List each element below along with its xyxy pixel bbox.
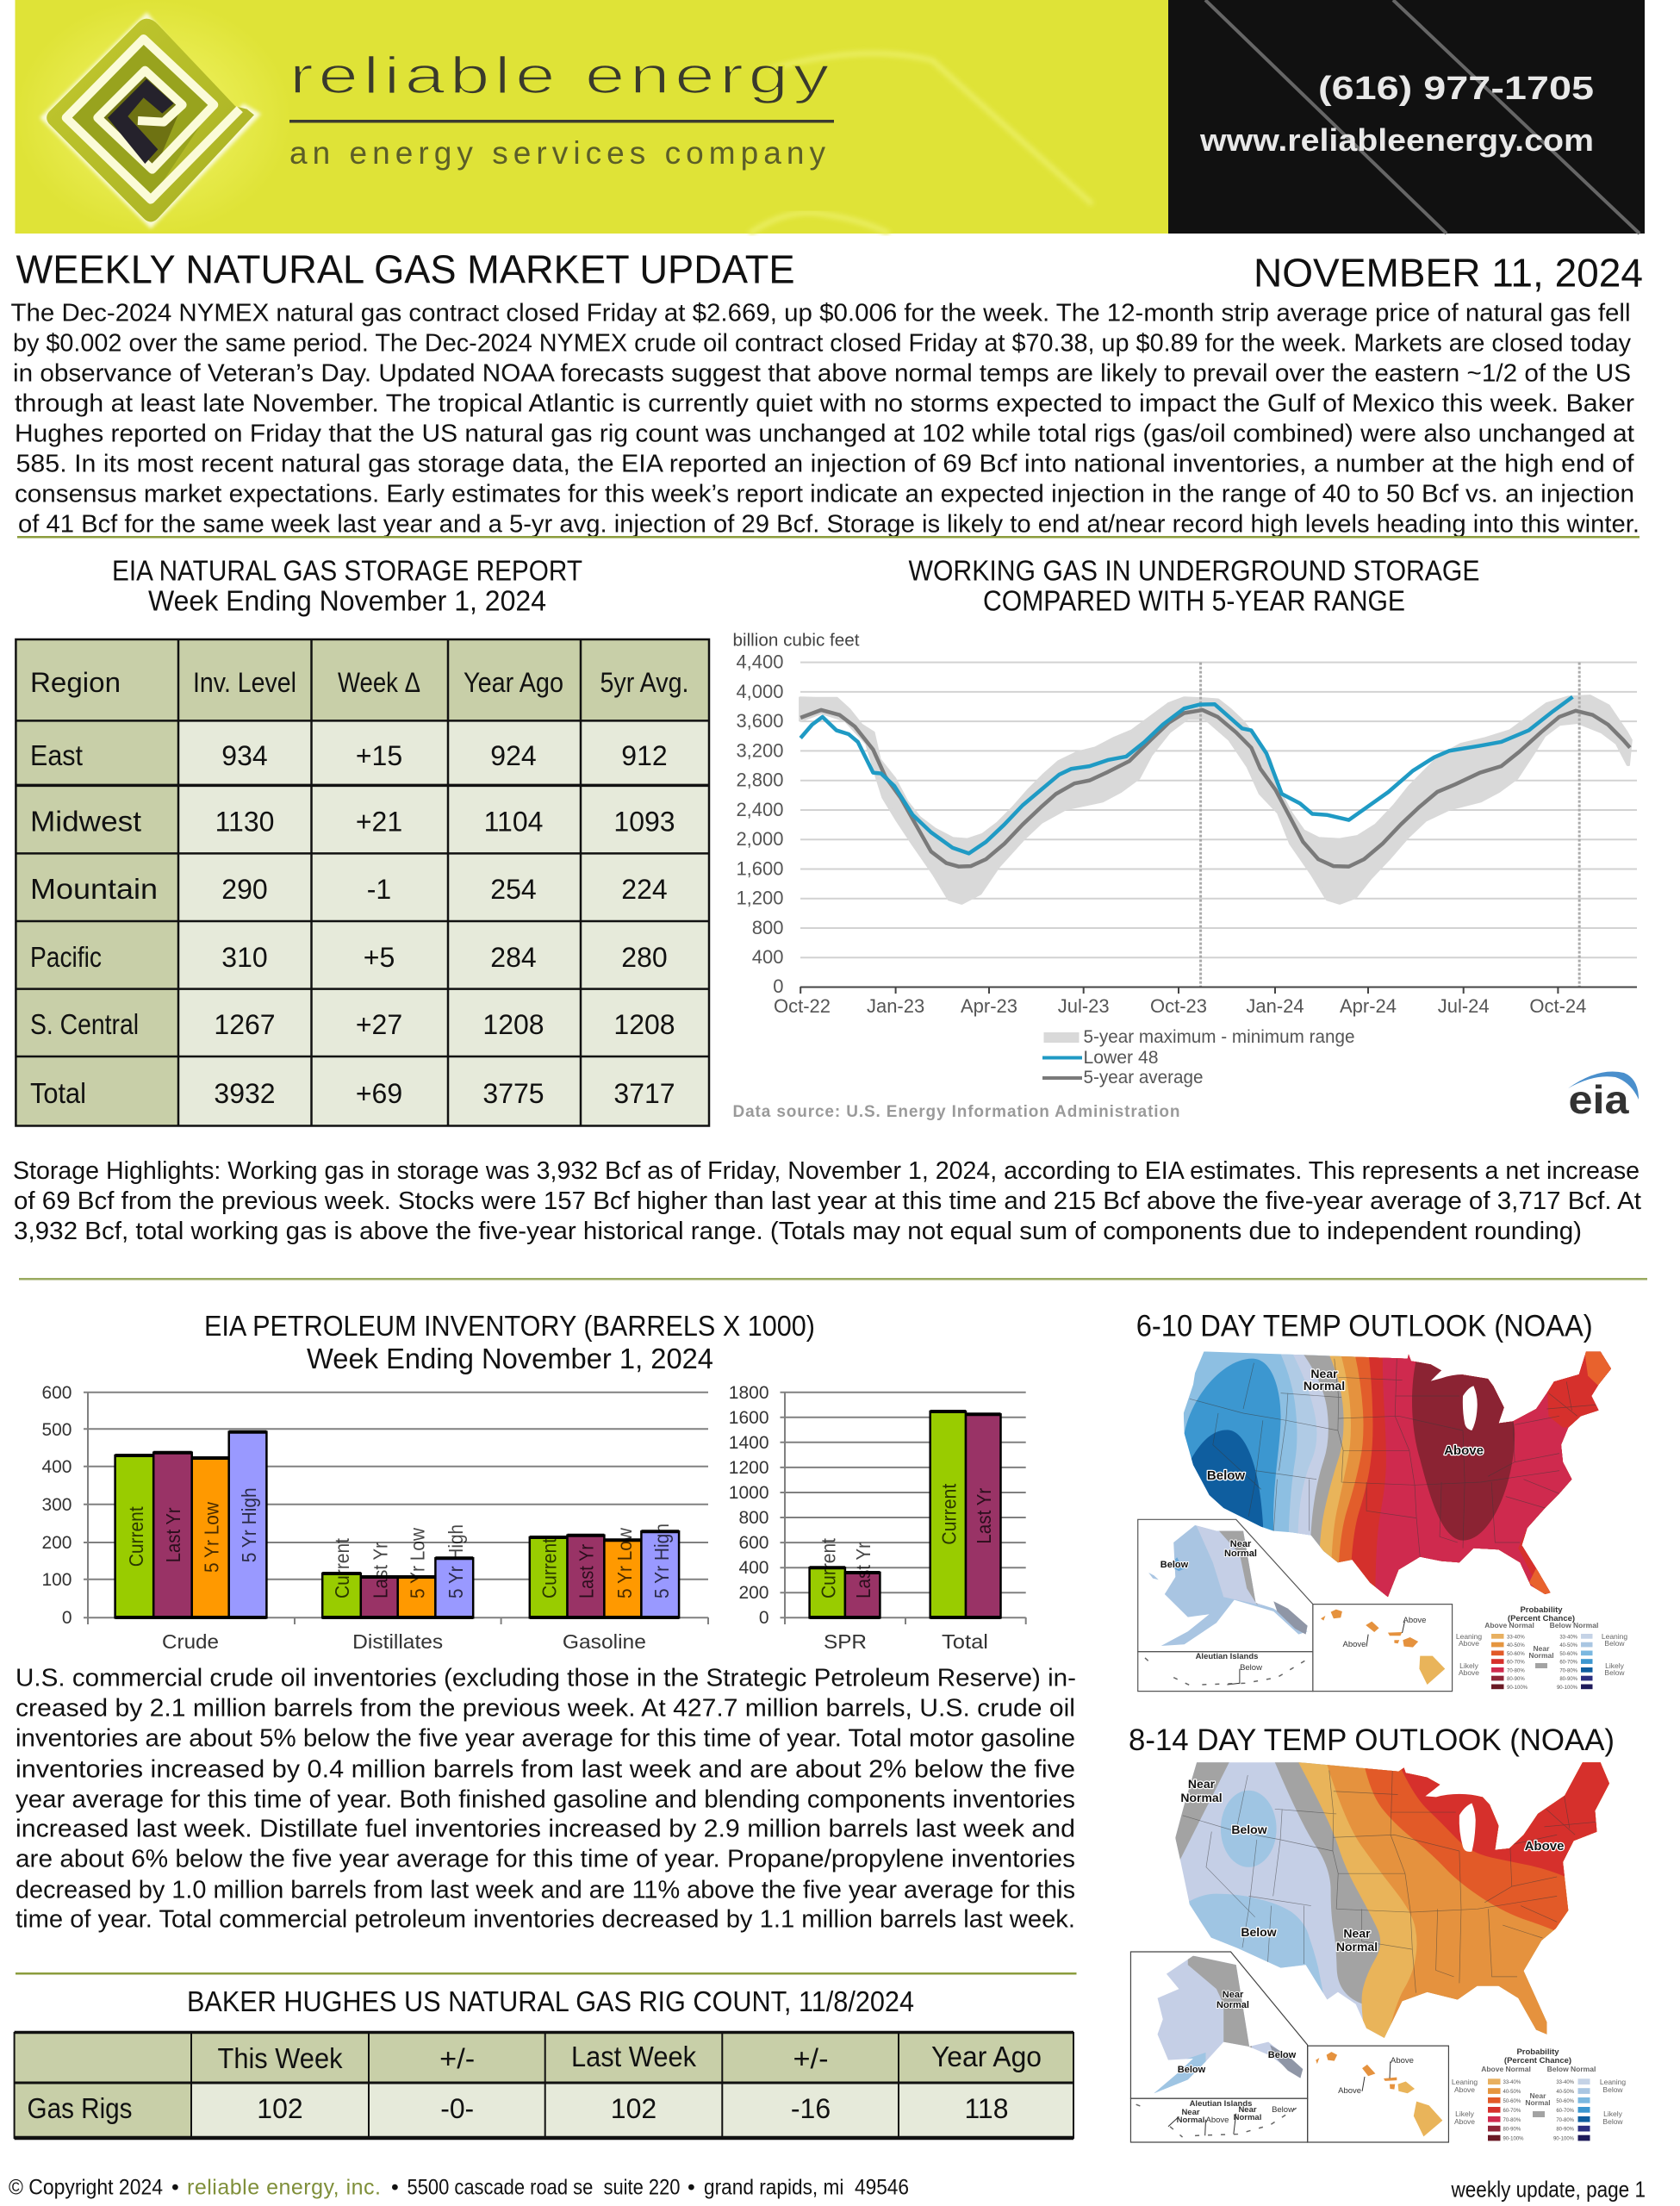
chart: working gas line chart: 2,000 [736,828,784,850]
chart: working gas line chart: billion cubic feet [732,631,860,650]
table: storage report: 290 [221,874,268,905]
chart: petroleum bars left: 300 [41,1495,72,1515]
company name: reliable energy [289,47,834,104]
map legend: (Percent Chance) [1508,1614,1575,1623]
text block: market summary: The Dec-2024 NYMEX natural gas contract closed Friday at $2.669, up $0.006 for the week. The 12-month strip average price of natural gas fell [10,300,1630,327]
chart: petroleum bars right: Current [938,1483,961,1545]
table: storage report: 3932 [214,1078,276,1109]
table: rig count: This Week [217,2042,343,2074]
map: 8-14 day temperature outlook: Below [1231,1823,1267,1836]
data source note: Data source: U.S. Energy Information Administration [732,1103,1180,1121]
chart: working gas line chart: 0 [773,975,784,997]
map legend: 90-100% [1503,2137,1524,2142]
chart: working gas line chart: Jan-24 [1246,995,1304,1017]
text block: storage highlights: 3,932 Bcf, total working gas is above the five-year historical range. (Totals may not equal sum of components due to independent rounding) [14,1218,1582,1245]
map legend [1456,1605,1627,1691]
text block: market summary: in observance of Veteran’s Day. Updated NOAA forecasts suggest that above normal temps are likely to prevail over the eastern ~1/2 of the US [13,360,1631,388]
table: storage report: Pacific [30,941,102,973]
map legend: 40-50% [1559,1643,1578,1648]
chart: petroleum bars right: 1200 [729,1458,768,1478]
chart legend [1042,1027,1354,1087]
map legend: Below [1604,1668,1625,1677]
map: 8-14 day temperature outlook: Below [1268,2050,1297,2060]
chart: working gas line chart: 4,400 [736,651,784,672]
chart: petroleum bars right: 200 [738,1583,768,1603]
heading: 8-14 day outlook: 8-14 DAY TEMP OUTLOOK (NOAA) [1129,1723,1615,1757]
table: storage report: 254 [490,874,537,905]
table: storage report: Midwest [30,805,141,838]
map legend: Probability [1516,2047,1559,2057]
map legend: 90-100% [1557,1686,1578,1691]
table: storage report: +21 [356,807,402,838]
map legend: Above [1459,1639,1479,1648]
map legend: 33-40% [1559,1636,1578,1641]
footer: copyright and address: • [171,2175,179,2199]
chart: petroleum bars right: Total [942,1630,988,1653]
text block: market summary: through at least late November. The tropical Atlantic is currently quiet with no storms expected to impact the Gulf of Mexico this week. Baker [15,389,1634,417]
table: storage report: 310 [221,942,268,973]
contiguous US zones [1173,1347,1620,1605]
table: storage report: 280 [621,942,668,973]
table: storage report: 912 [621,740,668,771]
map: 6-10 day temperature outlook: Below [1240,1663,1262,1673]
chart: petroleum bars left: 5 Yr High [650,1524,673,1598]
chart: petroleum bars left: 5 Yr Low [613,1528,636,1598]
table: storage report: Week Δ [338,667,420,698]
header banner [16,0,1645,234]
chart: petroleum bars right: 400 [738,1558,768,1578]
table: storage report: 1104 [484,807,543,838]
chart: petroleum bars right: Last Yr [852,1542,874,1598]
text block: market summary: by $0.002 over the same period. The Dec-2024 NYMEX crude oil contract closed Friday at $70.38, up $0.89 for the week. Markets are closed today [13,329,1631,357]
table: storage report: +15 [356,740,402,771]
Alaska [1154,1956,1301,2094]
map: 6-10 day temperature outlook: Above [1343,1640,1366,1649]
icon: eia logo [1568,1071,1639,1122]
map legend: 60-70% [1556,2109,1575,2114]
chart legend: 5-year average [1084,1068,1203,1087]
map: 8-14 day temperature outlook: Near [1238,2105,1257,2115]
map legend: 80-90% [1556,2127,1575,2132]
chart: petroleum bars right: SPR [824,1630,867,1653]
chart: working gas line chart: 800 [752,917,784,938]
chart: petroleum bars right: Last Yr [973,1487,995,1544]
chart: petroleum bars right: 0 [759,1608,768,1628]
table: rig count: 102 [611,2093,656,2124]
chart: petroleum bars right: Current [817,1537,839,1598]
heading: petroleum inventory [204,1310,815,1374]
icon: eia logo: eia [1568,1077,1629,1122]
phone number: (616) 977-1705 [1318,71,1594,107]
chart: working gas line chart: Jul-24 [1438,995,1490,1017]
company tagline: an energy services company [289,135,825,171]
map legend: Below Normal [1550,1621,1598,1630]
insets frames [1138,1519,1453,1692]
heading: petroleum inventory: EIA PETROLEUM INVENTORY (BARRELS X 1000) [204,1310,815,1342]
table: storage report: 3717 [613,1078,675,1109]
table: storage report: 284 [490,942,537,973]
map: 8-14 day temperature outlook: Below [1272,2105,1294,2115]
map: 8-14 day temperature outlook: Normal [1336,1940,1378,1954]
table: rig count [15,2032,1073,2139]
website: www.reliableenergy.com [1199,122,1594,158]
map: 8-14 day temperature outlook: Below [1241,1925,1277,1939]
map legend: 80-90% [1503,2127,1521,2132]
table: storage report: 1130 [215,807,274,838]
Hawaii [1321,1610,1445,1685]
chart: petroleum bars left: Distillates [352,1630,443,1653]
map legend: Leaning [1602,1632,1627,1641]
chart: petroleum bars left: Crude [162,1630,219,1653]
table: storage report: Inv. Level [193,667,296,698]
map legend: Normal [1528,1651,1554,1660]
map: 8-14 day temperature outlook: Above [1338,2086,1361,2096]
map: 8-14 day temperature outlook: Near [1181,2108,1200,2117]
contiguous US zones [1170,1760,1620,2043]
chart: petroleum bars left: Gasoline [563,1630,646,1653]
map legend: Above Normal [1484,1621,1534,1630]
chart: petroleum bars right: 1600 [729,1408,768,1428]
table: storage report: 1208 [482,1009,544,1040]
table: rig count: +/- [439,2043,475,2074]
map legend: Near [1530,2091,1546,2100]
footer: copyright and address: © Copyright 2024 [9,2175,163,2199]
chart: petroleum bars left: 600 [41,1383,72,1403]
map: 8-14 day temperature outlook: Below [1178,2065,1206,2075]
chart: petroleum bars left: 5 Yr High [445,1524,467,1598]
text block: storage highlights: Storage Highlights: Working gas in storage was 3,932 Bcf as of Friday, November 1, 2024, according to EIA estimates. This represents a net increase [13,1157,1640,1185]
chart: petroleum bars left: 400 [41,1457,72,1477]
chart: working gas line chart: 4,000 [736,681,784,702]
heading: 6-10 day outlook: 6-10 DAY TEMP OUTLOOK (NOAA) [1136,1310,1593,1343]
map legend: 40-50% [1503,2090,1521,2095]
map legend: Above [1454,2117,1475,2126]
text block: petroleum commentary: decreased by 1.0 million barrels from last week and are 11% above the five year average for this [16,1876,1075,1904]
table: rig count: Last Week [571,2041,696,2072]
map legend: Probability [1520,1605,1563,1615]
chart: working gas line chart: Jul-23 [1058,995,1110,1017]
text block: petroleum commentary: are about 6% below the five year average for this time of year. Propane/propylene inventories [16,1846,1075,1873]
table: storage report: Region [30,667,121,698]
text block: petroleum commentary: increased last week. Distillate fuel inventories increased by 2.9 million barrels last week and [16,1816,1075,1843]
footer: copyright and address: • [688,2175,695,2199]
text block: market summary: of 41 Bcf for the same week last year and a 5-yr avg. injection of 29 Bcf. Storage is likely to end at/near record high levels heading into this winter. [18,510,1640,538]
text block: petroleum commentary [16,1665,1076,1934]
chart: petroleum bars right [729,1383,1026,1653]
text block: petroleum commentary: inventories are about 5% below the five year average for this time of year. Total motor gasoline [16,1725,1075,1753]
chart: petroleum bars left: Current [125,1506,147,1567]
table: rig count: 118 [964,2093,1009,2124]
chart: petroleum bars left: 5 Yr Low [200,1502,222,1573]
map legend: Likely [1459,1661,1479,1670]
map legend: Below [1604,1639,1625,1648]
Alaska [1161,1525,1308,1646]
map legend: 70-80% [1503,2118,1521,2123]
chart: petroleum bars right: 800 [738,1508,768,1528]
heading: petroleum inventory: Week Ending November 1, 2024 [307,1343,713,1374]
map: 8-14 day temperature outlook: Normal [1216,2000,1249,2010]
table: storage report: 924 [490,740,537,771]
map legend: 33-40% [1507,1636,1525,1641]
table: storage report: 1267 [214,1009,276,1040]
text block: petroleum commentary: creased by 2.1 million barrels from the previous week. At 427.7 million barrels, U.S. crude oil [16,1695,1075,1723]
chart: petroleum bars right: 1000 [729,1483,768,1503]
footer: copyright and address: reliable energy, inc. [187,2175,381,2199]
table: storage report: 1093 [613,807,675,838]
map legend: Above [1454,2085,1475,2094]
text block: market summary: consensus market expectations. Early estimates for this week’s report indicate an expected injection in the range of 40 to 50 Bcf vs. an injection [15,481,1634,508]
chart: working gas line chart: Oct-24 [1529,995,1586,1017]
chart: petroleum bars left: Last Yr [162,1507,184,1562]
footer: copyright and address [9,2175,909,2199]
text block: market summary: 585. In its most recent natural gas storage data, the EIA reported an injection of 69 Bcf into national inventories, a number at the high end of [16,450,1634,477]
map legend: 90-100% [1507,1686,1528,1691]
table: storage report: Total [30,1077,86,1109]
chart: working gas line chart: Apr-24 [1340,995,1397,1017]
map legend: 60-70% [1503,2109,1521,2114]
map: 8-14 day temperature outlook: Normal [1234,2113,1261,2122]
map legend: Below [1602,2117,1623,2126]
table: storage report: +5 [364,942,395,973]
chart: working gas line chart: 3,600 [736,710,784,732]
map: 8-14 day temperature outlook: Above [1391,2056,1414,2066]
map legend: 50-60% [1507,1652,1525,1657]
table: storage report: S. Central [30,1008,139,1040]
map: 6-10 day temperature outlook: Above [1403,1616,1426,1625]
heading: storage report [112,555,582,617]
table: rig count: -16 [791,2093,831,2124]
chart: working gas line chart: Oct-23 [1150,995,1207,1017]
map: 6-10 day temperature outlook: Below [1207,1468,1245,1483]
chart: petroleum bars right: 1400 [729,1433,768,1453]
map: 6-10 day temperature outlook: Near [1230,1539,1252,1549]
Great Lakes [1431,1357,1488,1430]
chart: working gas line chart: 1,200 [736,888,784,908]
text block: storage highlights: of 69 Bcf from the previous week. Stocks were 157 Bcf higher than last year at this time and 215 Bcf above the five-year average of 3,717 Bcf. At [14,1187,1641,1215]
table: storage report: 224 [621,874,668,905]
map legend: Below [1602,2085,1623,2094]
map legend: 80-90% [1507,1677,1525,1682]
map: 8-14 day temperature outlook [1130,1760,1626,2142]
chart: petroleum bars left: 5 Yr High [238,1487,260,1562]
chart legend: 5-year maximum - minimum range [1084,1027,1354,1047]
map: 6-10 day temperature outlook: Normal [1304,1379,1345,1393]
panel: green logo band [16,0,1168,234]
map legend: Near [1534,1644,1550,1653]
map legend: Likely [1455,2109,1475,2118]
map legend: 70-80% [1559,1668,1578,1673]
chart: petroleum bars left: 500 [41,1420,72,1440]
map legend: 40-50% [1556,2090,1575,2095]
heading: working gas chart: COMPARED WITH 5-YEAR RANGE [983,584,1405,617]
heading: storage report: Week Ending November 1, 2024 [148,584,546,617]
map: 8-14 day temperature outlook: Normal [1180,1791,1223,1804]
map legend [1452,2047,1626,2142]
chart: working gas line chart [732,631,1639,1122]
map: 8-14 day temperature outlook: Above [1206,2116,1229,2125]
table: storage report: East [30,739,83,771]
Lower 48 line [800,697,1572,853]
map legend: Leaning [1452,2078,1478,2086]
map legend: 33-40% [1556,2080,1575,2085]
map legend: 80-90% [1559,1677,1578,1682]
chart legend: Lower 48 [1084,1048,1158,1068]
map legend: 40-50% [1507,1643,1525,1648]
footer: page number: weekly update, page 1 [1451,2177,1646,2203]
table: storage report: 3775 [482,1078,544,1109]
map: 8-14 day temperature outlook: Above [1525,1839,1564,1854]
map legend: Below Normal [1547,2065,1596,2073]
map legend: Above [1459,1668,1479,1677]
map legend: Above Normal [1481,2065,1531,2073]
map legend: Likely [1603,2109,1623,2118]
chart: petroleum bars left: Last Yr [369,1542,391,1598]
map: 6-10 day temperature outlook: Normal [1224,1549,1257,1559]
chart: working gas line chart: 2,400 [736,799,784,820]
chart: petroleum bars right: 1800 [729,1383,768,1403]
heading: storage report: EIA NATURAL GAS STORAGE REPORT [112,555,582,586]
text block: petroleum commentary: U.S. commercial crude oil inventories (excluding those in the Strategic Petroleum Reserve) in- [16,1665,1076,1692]
chart: petroleum bars left: 0 [62,1608,72,1628]
text block: petroleum commentary: time of year. Total commercial petroleum inventories decreased by 1.1 million barrels last week. [16,1906,1075,1934]
table: rig count: Year Ago [931,2041,1042,2072]
chart: petroleum bars left: 5 Yr Low [407,1528,429,1598]
text block: petroleum commentary: year average for this time of year. Both finished gasoline and blending components inventories [16,1785,1075,1813]
map: 6-10 day temperature outlook [1138,1347,1627,1692]
chart: working gas line chart: 400 [752,946,784,968]
heading: rig count: BAKER HUGHES US NATURAL GAS RIG COUNT, 11/8/2024 [187,1985,914,2017]
table: rig count: Gas Rigs [28,2092,133,2124]
icon: reliable energy diamond logo [46,19,254,222]
text block: storage highlights [13,1157,1641,1245]
chart: petroleum bars left: Current [538,1537,561,1598]
map legend: 50-60% [1503,2099,1521,2104]
map legend: 60-70% [1559,1660,1578,1665]
5-year average line [800,710,1630,867]
footer: copyright and address: grand rapids, mi 49546 [704,2175,909,2199]
table: storage report: -1 [367,874,391,905]
footer: copyright and address: • [391,2175,399,2199]
map legend: 70-80% [1507,1668,1525,1673]
chart: working gas line chart: 3,200 [736,739,784,762]
text block: petroleum commentary: inventories increased by 0.4 million barrels from last week and are about 2% below the five [16,1755,1075,1783]
footer: copyright and address: 5500 cascade road se suite 220 [407,2175,681,2199]
panel: black contact band [1168,0,1645,234]
Great Lakes [1425,1773,1483,1852]
map legend: 90-100% [1553,2137,1575,2142]
map legend: 33-40% [1503,2080,1521,2085]
chart: petroleum bars left: Last Yr [576,1544,598,1598]
map: 8-14 day temperature outlook: Aleutian Islands [1190,2099,1252,2109]
table: storage report: Year Ago [464,667,563,698]
chart: working gas line chart: Jan-23 [867,995,924,1017]
table: storage report: +27 [356,1009,402,1040]
map: 6-10 day temperature outlook: Near [1310,1367,1338,1380]
map legend: 70-80% [1556,2118,1575,2123]
map legend: Leaning [1456,1632,1482,1641]
chart: petroleum bars left: Current [331,1537,353,1598]
date: NOVEMBER 11, 2024 [1254,250,1643,295]
map legend: Leaning [1600,2078,1626,2086]
chart: working gas line chart: 2,800 [736,769,784,791]
table: storage report [16,639,709,1125]
map: 8-14 day temperature outlook: Near [1188,1777,1216,1791]
chart: petroleum bars left: 200 [41,1533,72,1553]
map legend: 50-60% [1559,1652,1578,1657]
title: WEEKLY NATURAL GAS MARKET UPDATE [16,246,794,291]
chart: petroleum bars left: 100 [41,1570,72,1590]
header rule [289,120,834,122]
table: storage report: 5yr Avg. [600,667,689,698]
map: 6-10 day temperature outlook: Above [1444,1443,1484,1458]
table: rig count: -0- [440,2093,474,2124]
map legend: 60-70% [1507,1660,1525,1665]
chart: petroleum bars right: 600 [738,1533,768,1553]
table: storage report: 934 [221,740,268,771]
table: storage report: Mountain [30,873,158,905]
heading: working gas chart: WORKING GAS IN UNDERGROUND STORAGE [908,555,1480,586]
text block: market summary [10,300,1640,538]
map legend: (Percent Chance) [1504,2056,1571,2066]
table: rig count: +/- [793,2043,829,2074]
table: rig count: 102 [257,2093,303,2124]
heading: working gas chart [908,555,1480,617]
chart: petroleum bars left [41,1383,708,1653]
map legend: Normal [1525,2098,1551,2107]
5-year range band [800,695,1631,903]
chart: working gas line chart: 1,600 [736,858,784,879]
chart: working gas line chart: Apr-23 [961,995,1017,1017]
map: 6-10 day temperature outlook: Aleutian Islands [1196,1652,1258,1661]
map: 8-14 day temperature outlook: Near [1223,1990,1244,2000]
map legend: Likely [1605,1661,1625,1670]
map: 6-10 day temperature outlook: Below [1160,1560,1189,1570]
chart: working gas line chart: Oct-22 [774,995,831,1017]
map: 8-14 day temperature outlook: Normal [1177,2116,1204,2125]
Hawaii [1316,2052,1442,2136]
table: storage report: 1208 [613,1009,675,1040]
insets frames [1130,1952,1448,2142]
text block: market summary: Hughes reported on Friday that the US natural gas rig count was unchanged at 102 while total rigs (gas/oil combined) were also unchanged at [15,421,1634,448]
map legend: 50-60% [1556,2099,1575,2104]
map: 8-14 day temperature outlook: Near [1343,1927,1371,1941]
table: storage report: +69 [356,1078,402,1109]
